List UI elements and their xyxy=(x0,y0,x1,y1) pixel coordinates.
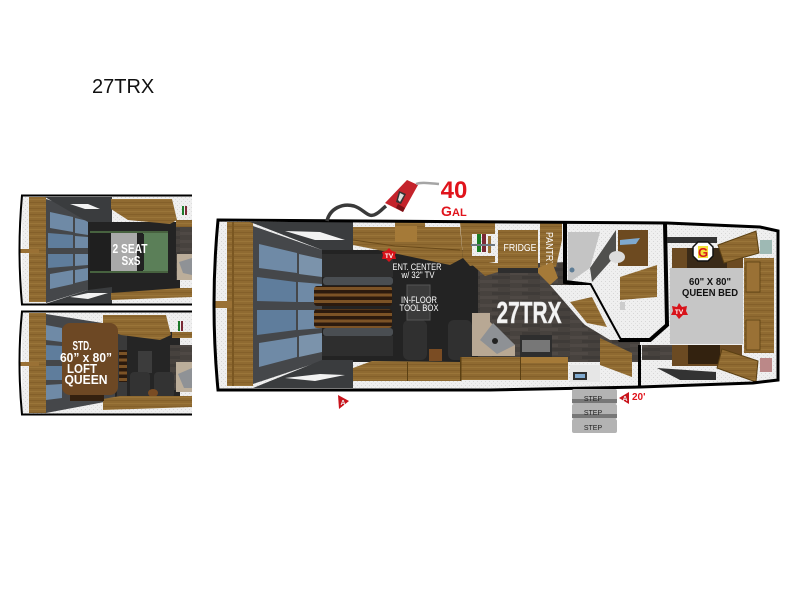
bed label: 60" X 80" xyxy=(689,277,731,288)
recliner seats xyxy=(403,320,472,361)
top wardrobe xyxy=(718,231,759,263)
bottle shelf xyxy=(460,222,495,266)
pantry: PANTRY xyxy=(543,232,554,267)
tie-down slats xyxy=(314,286,392,328)
bottom wardrobe xyxy=(717,349,758,382)
lower side rails xyxy=(253,360,353,388)
galley sink area xyxy=(570,365,600,382)
loft label: LOFT xyxy=(67,361,97,376)
labels: garage: ENT. CENTER xyxy=(392,262,442,272)
bedroom: QUEEN BED xyxy=(682,288,738,299)
loft label xyxy=(60,338,112,387)
lower cabinets xyxy=(353,357,568,381)
TV badge: bedroom xyxy=(671,303,688,319)
headboard cabinet xyxy=(744,258,774,353)
TV badge: bedroom: TV xyxy=(675,309,684,316)
floorplan outline xyxy=(214,220,778,390)
loft bed xyxy=(62,323,118,395)
inset2 outline xyxy=(20,312,192,414)
icon: awning marker door xyxy=(619,392,646,404)
closet white wedge xyxy=(550,285,620,340)
panel: loft queen inset xyxy=(19,312,192,415)
pantry xyxy=(540,223,562,267)
fuel capacity xyxy=(441,177,467,219)
shower xyxy=(568,232,600,282)
loft label: 60” x 80” xyxy=(60,350,112,365)
living floor xyxy=(478,262,640,362)
ramp door with windows xyxy=(253,226,322,384)
sofa seats xyxy=(322,254,393,356)
labels: garage: TOOL BOX xyxy=(400,303,438,313)
icon: generator xyxy=(693,242,713,261)
icon: generator: G xyxy=(698,245,708,260)
bath wall xyxy=(565,222,667,340)
steps: STEP xyxy=(584,396,602,403)
icon: awning marker door: A xyxy=(622,396,628,403)
fridge: FRIDGE xyxy=(504,243,537,254)
inset vehicle xyxy=(90,231,168,273)
floorplan body xyxy=(214,220,778,390)
inset2 lower cabinets xyxy=(103,396,192,410)
inset floor xyxy=(88,222,180,296)
sink xyxy=(480,323,515,354)
panel: main floorplan xyxy=(214,220,778,390)
garage floor xyxy=(322,250,478,362)
icon: fuel pump and hose xyxy=(327,180,439,221)
queen bed xyxy=(670,268,743,344)
fuel capacity: G xyxy=(441,203,452,219)
inset label: 2 SEAT xyxy=(112,241,148,256)
labels: garage xyxy=(392,262,442,313)
steps: STEP xyxy=(584,410,602,417)
icon: awning marker rear: A xyxy=(340,400,346,407)
rear wood wall xyxy=(214,222,253,386)
steps xyxy=(572,389,617,433)
panel: side-by-side inset: SxS xyxy=(122,253,141,268)
loft label: STD. xyxy=(72,338,92,353)
toilet and vanity xyxy=(618,230,648,266)
upper cabinets xyxy=(353,222,463,265)
inset rear wood wall xyxy=(29,197,46,302)
inset2 ramp door xyxy=(46,314,115,413)
model name: 27TRX xyxy=(496,295,562,330)
labels: garage: IN-FLOOR xyxy=(401,295,437,305)
inset upper cabinets xyxy=(111,199,177,224)
inset lower cabinets xyxy=(111,288,192,300)
icon: awning marker door: 20' xyxy=(632,392,646,403)
title: 27TRX xyxy=(92,76,154,98)
fuel capacity: AL xyxy=(452,207,467,219)
icon: awning marker rear xyxy=(338,395,349,409)
bedroom divider wall xyxy=(638,345,641,387)
fuel capacity: 40 xyxy=(441,177,467,204)
inset2 floor xyxy=(115,332,180,400)
countertop xyxy=(472,313,515,356)
labels: garage: w/ 32" TV xyxy=(401,270,434,280)
inset2 upper cabinets xyxy=(103,315,171,340)
inset outline xyxy=(20,196,192,304)
loft label: QUEEN xyxy=(64,372,108,387)
lower right cabinet xyxy=(600,338,632,377)
angled closet door xyxy=(570,297,607,327)
bedroom xyxy=(642,231,774,382)
inset ramp door xyxy=(46,199,88,303)
steps: STEP xyxy=(584,425,602,432)
fridge xyxy=(498,230,538,273)
stove xyxy=(520,335,552,357)
TV badge: entertainment: TV xyxy=(385,253,394,260)
floor mat xyxy=(657,368,716,380)
upper side rails xyxy=(250,222,353,250)
panel: side-by-side inset xyxy=(19,196,192,304)
floor tool box xyxy=(407,285,430,320)
cabinet below shelf xyxy=(470,263,498,276)
TV badge: entertainment xyxy=(382,248,396,262)
bathroom xyxy=(565,223,666,340)
angled cabinet xyxy=(538,262,558,285)
